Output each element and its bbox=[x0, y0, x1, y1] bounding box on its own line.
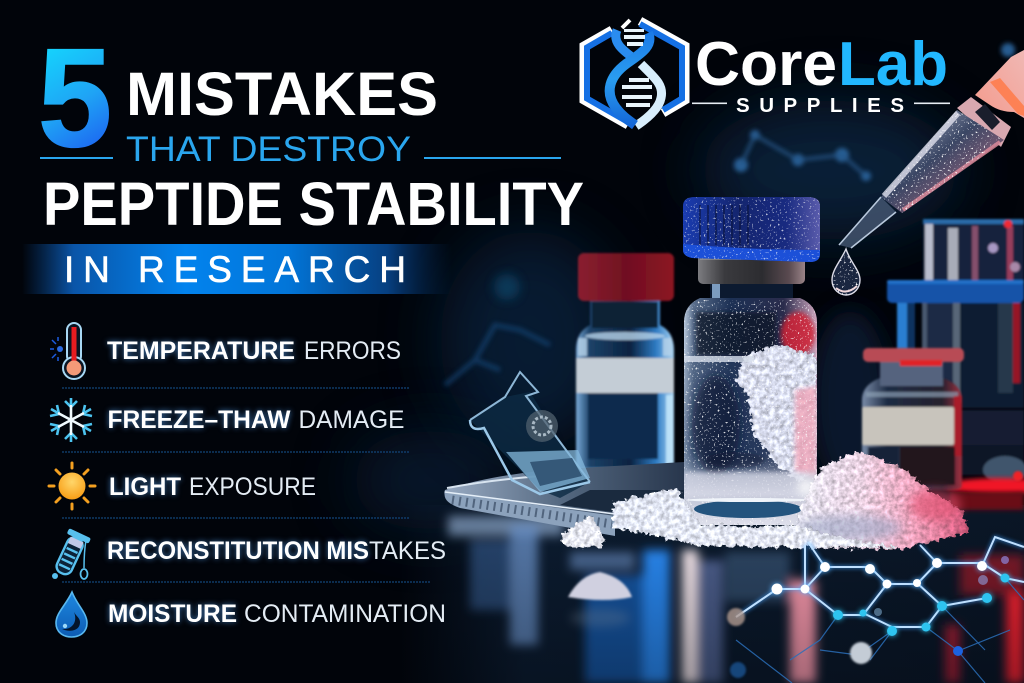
subheading: that destroy: THAT DESTROY bbox=[126, 130, 411, 169]
hanging drop bbox=[832, 249, 860, 295]
tilted glass piece bbox=[470, 372, 590, 498]
logo icon: hexagon with DNA bbox=[584, 20, 685, 126]
item: temperature errors: TEMPERATURE bbox=[107, 338, 295, 365]
item: reconstitution mistakes: RECONSTITUTION MIS bbox=[107, 538, 369, 565]
large powder mound bbox=[790, 452, 968, 549]
numeral 5: 5 bbox=[38, 19, 112, 176]
heading: mistakes: MISTAKES bbox=[126, 60, 438, 128]
dropper with drop bbox=[832, 50, 1024, 295]
list of five mistakes bbox=[49, 323, 446, 637]
item: reconstitution mistakes bbox=[51, 528, 446, 579]
item: moisture contamination bbox=[56, 592, 446, 637]
icon: thermometer bbox=[50, 323, 85, 379]
body bbox=[881, 110, 1004, 213]
top bulb bbox=[975, 50, 1024, 118]
powder piles bbox=[560, 452, 968, 600]
wordmark bbox=[692, 30, 950, 117]
main vial bbox=[683, 197, 820, 525]
banner: in research: IN RESEARCH bbox=[64, 249, 406, 290]
icon: sun bbox=[49, 463, 95, 509]
item: light exposure: LIGHT bbox=[109, 474, 181, 501]
item: freeze-thaw damage: DAMAGE bbox=[298, 407, 404, 434]
metal plate bbox=[444, 462, 690, 536]
pile on the table bbox=[568, 572, 632, 600]
item: freeze-thaw damage: FREEZE–THAW bbox=[108, 407, 291, 434]
wordmark: Lab bbox=[838, 30, 948, 99]
icon: water drop bbox=[56, 592, 87, 637]
item: light exposure bbox=[49, 463, 316, 509]
floor reflections bbox=[400, 505, 1024, 683]
right glass cylinders and rack bbox=[887, 219, 1024, 484]
item: freeze-thaw damage bbox=[50, 398, 404, 442]
collar bbox=[957, 97, 1011, 147]
title bbox=[38, 19, 584, 238]
right red glow bbox=[945, 471, 1024, 510]
heading: peptide stability: PEPTIDE STABILITY bbox=[43, 170, 584, 238]
small pile bbox=[560, 517, 605, 548]
wordmark: Core bbox=[695, 30, 837, 99]
item: moisture contamination: MOISTURE bbox=[108, 601, 237, 628]
back vial with red cap bbox=[576, 253, 674, 492]
table surface bbox=[400, 505, 1024, 683]
item: moisture contamination: CONTAMINATION bbox=[244, 601, 446, 628]
item: reconstitution mistakes: TAKES bbox=[369, 538, 446, 565]
background haze bbox=[350, 43, 1015, 530]
right small vial bbox=[862, 348, 964, 490]
wordmark: SUPPLIES bbox=[736, 94, 904, 117]
powder spread around vial bbox=[613, 488, 900, 548]
molecule network bbox=[727, 537, 1024, 683]
logo: CoreLab Supplies bbox=[584, 20, 950, 126]
item: light exposure: EXPOSURE bbox=[189, 474, 316, 501]
item: temperature errors: ERRORS bbox=[304, 338, 401, 365]
item: temperature errors bbox=[50, 323, 401, 379]
banner: in research bbox=[22, 244, 452, 294]
icon: test tube bbox=[51, 528, 91, 579]
tip bbox=[839, 197, 896, 248]
photo: laboratory scene bbox=[350, 43, 1024, 683]
icon: snowflake bbox=[50, 398, 92, 442]
